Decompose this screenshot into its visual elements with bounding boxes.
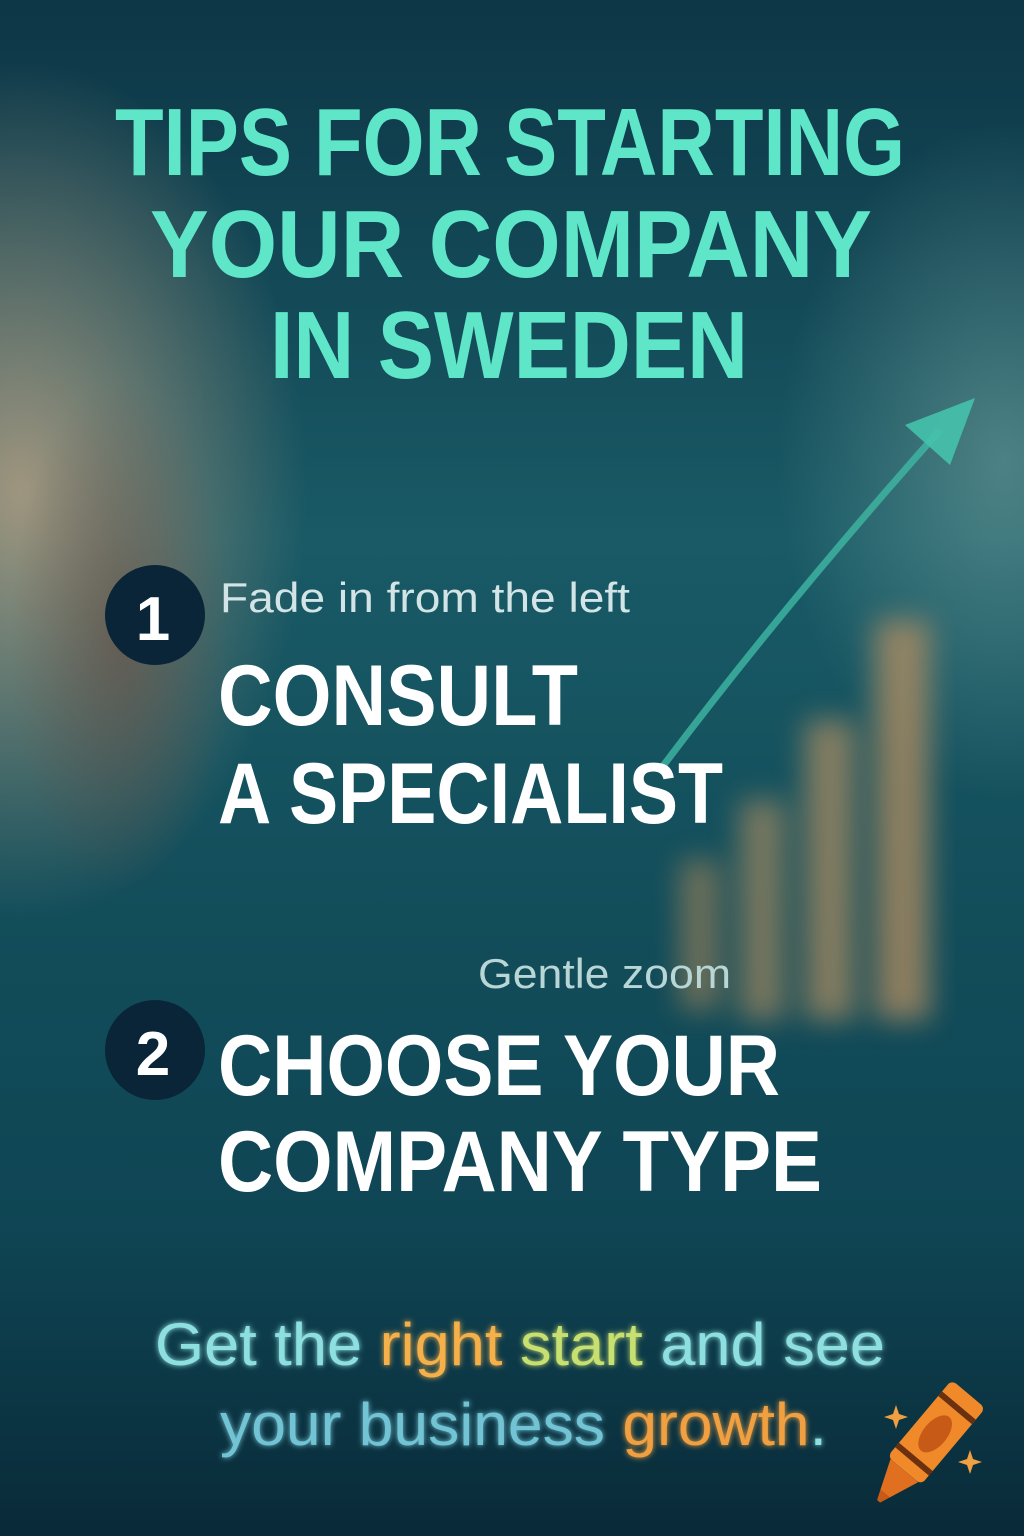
heading 2: CHOOSE YOUR bbox=[218, 1018, 780, 1114]
step 1 bbox=[105, 565, 723, 842]
caption 1: Fade in from the left bbox=[220, 574, 630, 621]
step 2 bbox=[105, 950, 822, 1210]
chart: blurred bars bbox=[680, 620, 930, 1020]
badge 1: 1 bbox=[136, 585, 170, 654]
heading 1: CONSULT bbox=[218, 648, 578, 744]
icon: growth arrow bbox=[660, 398, 975, 770]
footer tagline bbox=[155, 1311, 885, 1458]
heading 1: A SPECIALIST bbox=[218, 746, 723, 842]
title: YOUR COMPANY bbox=[150, 191, 872, 298]
caption 2: Gentle zoom bbox=[478, 950, 731, 997]
footer tagline: Get the right start and see bbox=[155, 1311, 885, 1378]
footer tagline: your business growth. bbox=[220, 1391, 827, 1458]
badge 2 bbox=[105, 1000, 205, 1100]
heading 1 bbox=[218, 648, 723, 842]
title: IN SWEDEN bbox=[270, 292, 748, 399]
heading 2 bbox=[218, 1018, 822, 1210]
badge 1 bbox=[105, 565, 205, 665]
icon: sparkles bbox=[884, 1405, 982, 1474]
icon: crayon bbox=[862, 1380, 985, 1515]
badge 2: 2 bbox=[136, 1020, 170, 1089]
title bbox=[115, 89, 905, 399]
heading 2: COMPANY TYPE bbox=[218, 1114, 822, 1210]
